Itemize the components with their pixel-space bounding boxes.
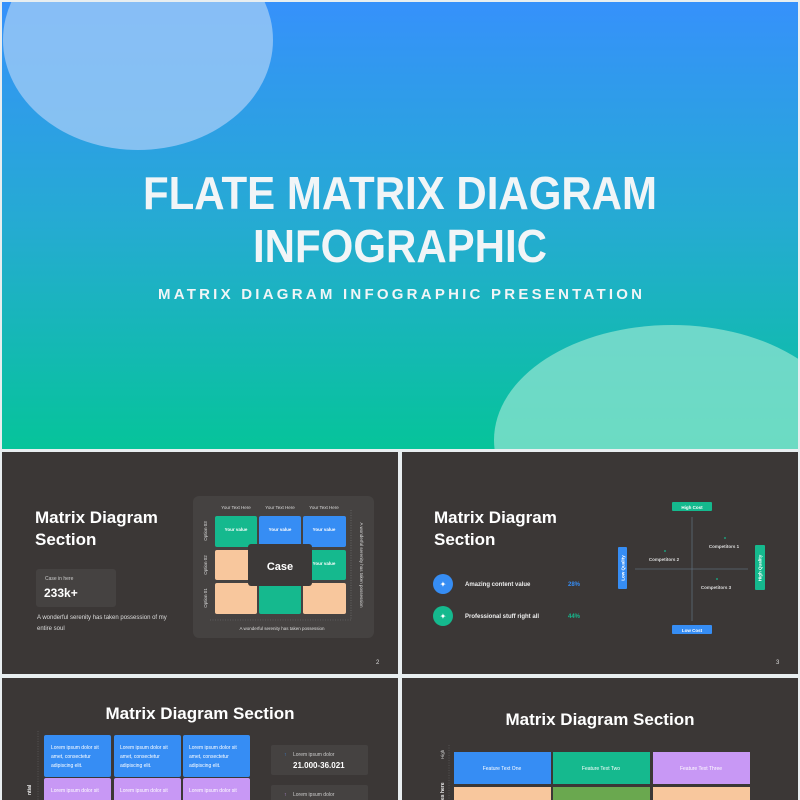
stat card 2: Lorem ipsum dolor xyxy=(293,792,335,798)
list item 2 xyxy=(433,606,581,626)
stat card 1: 21.000-36.021 xyxy=(293,761,345,770)
heading: Matrix Diagram xyxy=(434,508,557,527)
matrix chart: Your value xyxy=(269,527,292,532)
matrix chart: Option 01 xyxy=(203,588,208,608)
grid cells: adipiscing elit. xyxy=(120,763,151,769)
decorative circle bottom-right xyxy=(494,325,798,449)
quadrant chart: Competitors 1 xyxy=(709,544,740,549)
quadrant chart: High Cost xyxy=(681,505,703,510)
grid cells: adipiscing elit. xyxy=(51,763,82,769)
matrix chart: A wonderful serenity has taken possession xyxy=(239,626,325,631)
list item 1 xyxy=(433,574,581,594)
quadrant chart xyxy=(618,502,765,634)
matrix chart xyxy=(193,496,374,638)
grid cells: Lorem ipsum dolor sit xyxy=(51,788,99,794)
grid cells: Lorem ipsum dolor sit xyxy=(120,788,168,794)
quadrant chart: Competitors 2 xyxy=(649,557,680,562)
description: entire soul xyxy=(37,626,65,632)
list item 1: Amazing content value xyxy=(465,582,531,588)
list item 1: ✦ xyxy=(440,580,447,589)
title xyxy=(143,167,657,272)
description xyxy=(37,615,167,632)
panel: slide 5 feature matrix xyxy=(402,678,798,800)
feature cells: Feature Text One xyxy=(483,766,521,772)
heading: Matrix Diagram Section xyxy=(506,710,694,729)
matrix chart: Your Text Here xyxy=(221,505,251,510)
list item 1: 28% xyxy=(568,582,581,588)
heading: Matrix Diagram Section xyxy=(106,704,294,723)
stat card xyxy=(36,569,116,607)
grid cells: Lorem ipsum dolor sit xyxy=(189,788,237,794)
heading: Matrix Diagram xyxy=(35,508,158,527)
title: FLATE MATRIX DIAGRAM xyxy=(143,167,657,219)
quadrant chart: High Quality xyxy=(758,554,762,581)
title: INFOGRAPHIC xyxy=(253,220,547,272)
subtitle: MATRIX DIAGRAM INFOGRAPHIC PRESENTATION xyxy=(158,286,642,303)
grid cells: Lorem ipsum dolor sit xyxy=(189,745,237,751)
quadrant chart: Low Cost xyxy=(682,628,703,633)
quadrant chart: Competitors 3 xyxy=(701,585,732,590)
matrix chart: Your value xyxy=(225,527,248,532)
matrix chart: Your Text Here xyxy=(265,505,295,510)
case box xyxy=(248,544,312,586)
feature cells xyxy=(454,752,750,800)
stat card: 233k+ xyxy=(44,586,78,600)
matrix chart: Option 02 xyxy=(203,555,208,575)
case box: Case xyxy=(267,561,293,573)
stat card 2 xyxy=(271,785,368,800)
grid cells: Lorem ipsum dolor sit xyxy=(120,745,168,751)
grid cells: amet, consectetur xyxy=(120,754,160,760)
matrix chart: Your value xyxy=(313,561,336,566)
feature cells: Feature Text Three xyxy=(680,766,722,772)
panel: slide 2 matrix xyxy=(2,452,398,674)
grid cells: Lorem ipsum dolor sit xyxy=(51,745,99,751)
grid cells: amet, consectetur xyxy=(51,754,91,760)
decorative circle top-left xyxy=(3,0,273,150)
grid cells: amet, consectetur xyxy=(189,754,229,760)
stat card 2: ↑ xyxy=(284,792,286,798)
grid cells: adipiscing elit. xyxy=(189,763,220,769)
panel: slide 4 matrix table xyxy=(2,678,398,800)
quadrant chart: Low Quality xyxy=(620,555,626,581)
feature cells: Feature Text Two xyxy=(582,766,620,772)
heading: Section xyxy=(35,530,96,549)
heading xyxy=(35,508,158,549)
stat card 1: Lorem ipsum dolor xyxy=(293,752,335,758)
matrix chart: Your value xyxy=(313,527,336,532)
hero banner xyxy=(2,2,798,449)
heading: Section xyxy=(434,530,495,549)
list item 2: Professional stuff right all xyxy=(465,614,539,620)
matrix chart: Option 03 xyxy=(203,521,208,541)
matrix chart: Your Text Here xyxy=(309,505,339,510)
matrix chart: A wonderful serenity has taken possession xyxy=(359,522,364,608)
panel: slide 3 positioning map: 3 xyxy=(776,660,780,666)
panel: slide 5 feature matrix: es here xyxy=(440,782,446,800)
panel: slide 4 matrix table: ntial xyxy=(27,784,33,795)
grid cells xyxy=(44,735,250,800)
list item 2: ✦ xyxy=(440,612,447,621)
panel: slide 5 feature matrix: High xyxy=(440,749,445,759)
stat card 1 xyxy=(271,745,368,775)
list item 2: 44% xyxy=(568,614,581,620)
heading xyxy=(434,508,557,549)
panel: slide 2 matrix: 2 xyxy=(376,660,380,666)
panel: slide 3 positioning map xyxy=(402,452,798,674)
description: A wonderful serenity has taken possession of my xyxy=(37,615,167,621)
stat card 1: ↑ xyxy=(284,752,286,758)
stat card: Case in here xyxy=(45,576,74,582)
